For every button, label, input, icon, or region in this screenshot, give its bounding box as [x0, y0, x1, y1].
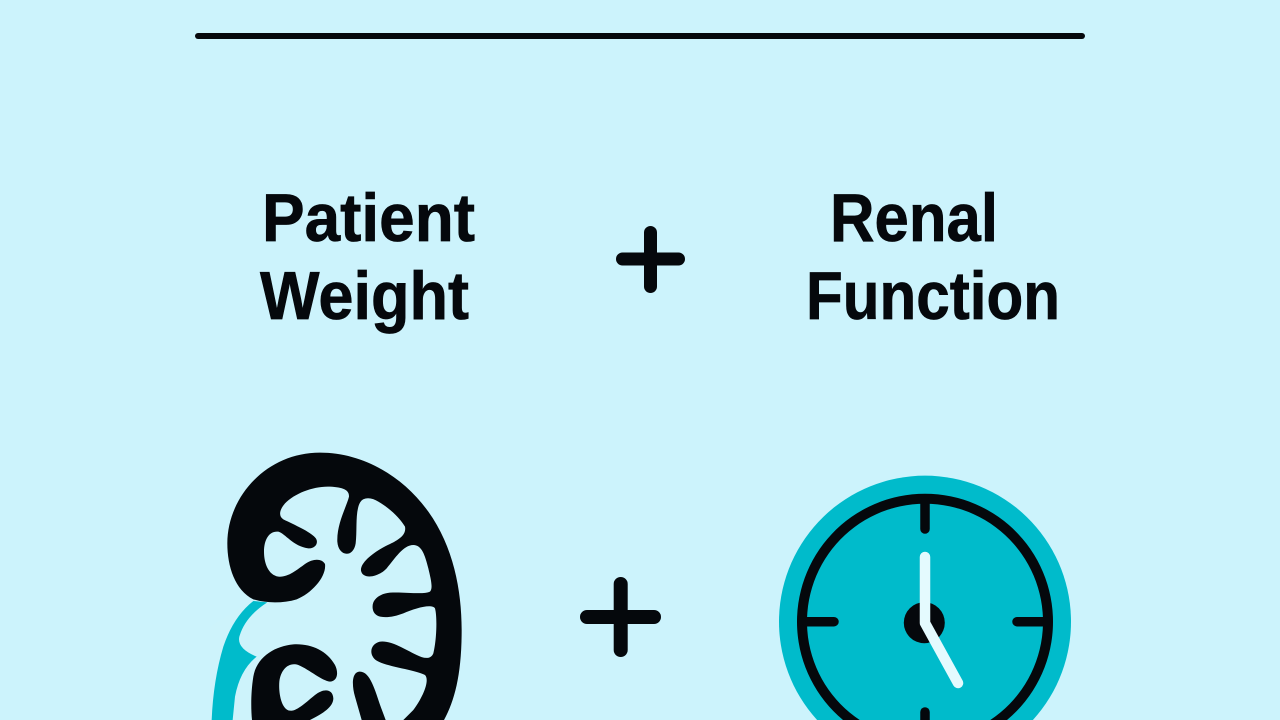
top heading rule	[198, 33, 1082, 39]
label: Renal Function: Renal	[830, 180, 998, 256]
icon: kidney	[210, 453, 462, 720]
label: Patient Weight: Weight	[260, 258, 469, 334]
label: Patient Weight: Patient	[262, 180, 475, 256]
ureter	[212, 601, 267, 720]
icon: clock	[779, 476, 1071, 720]
label: Patient Weight	[260, 180, 475, 334]
label: Renal Function: Function	[806, 258, 1060, 334]
plus sign between labels	[622, 232, 678, 286]
label: Renal Function	[806, 180, 1060, 334]
plus sign between icons	[587, 584, 654, 650]
